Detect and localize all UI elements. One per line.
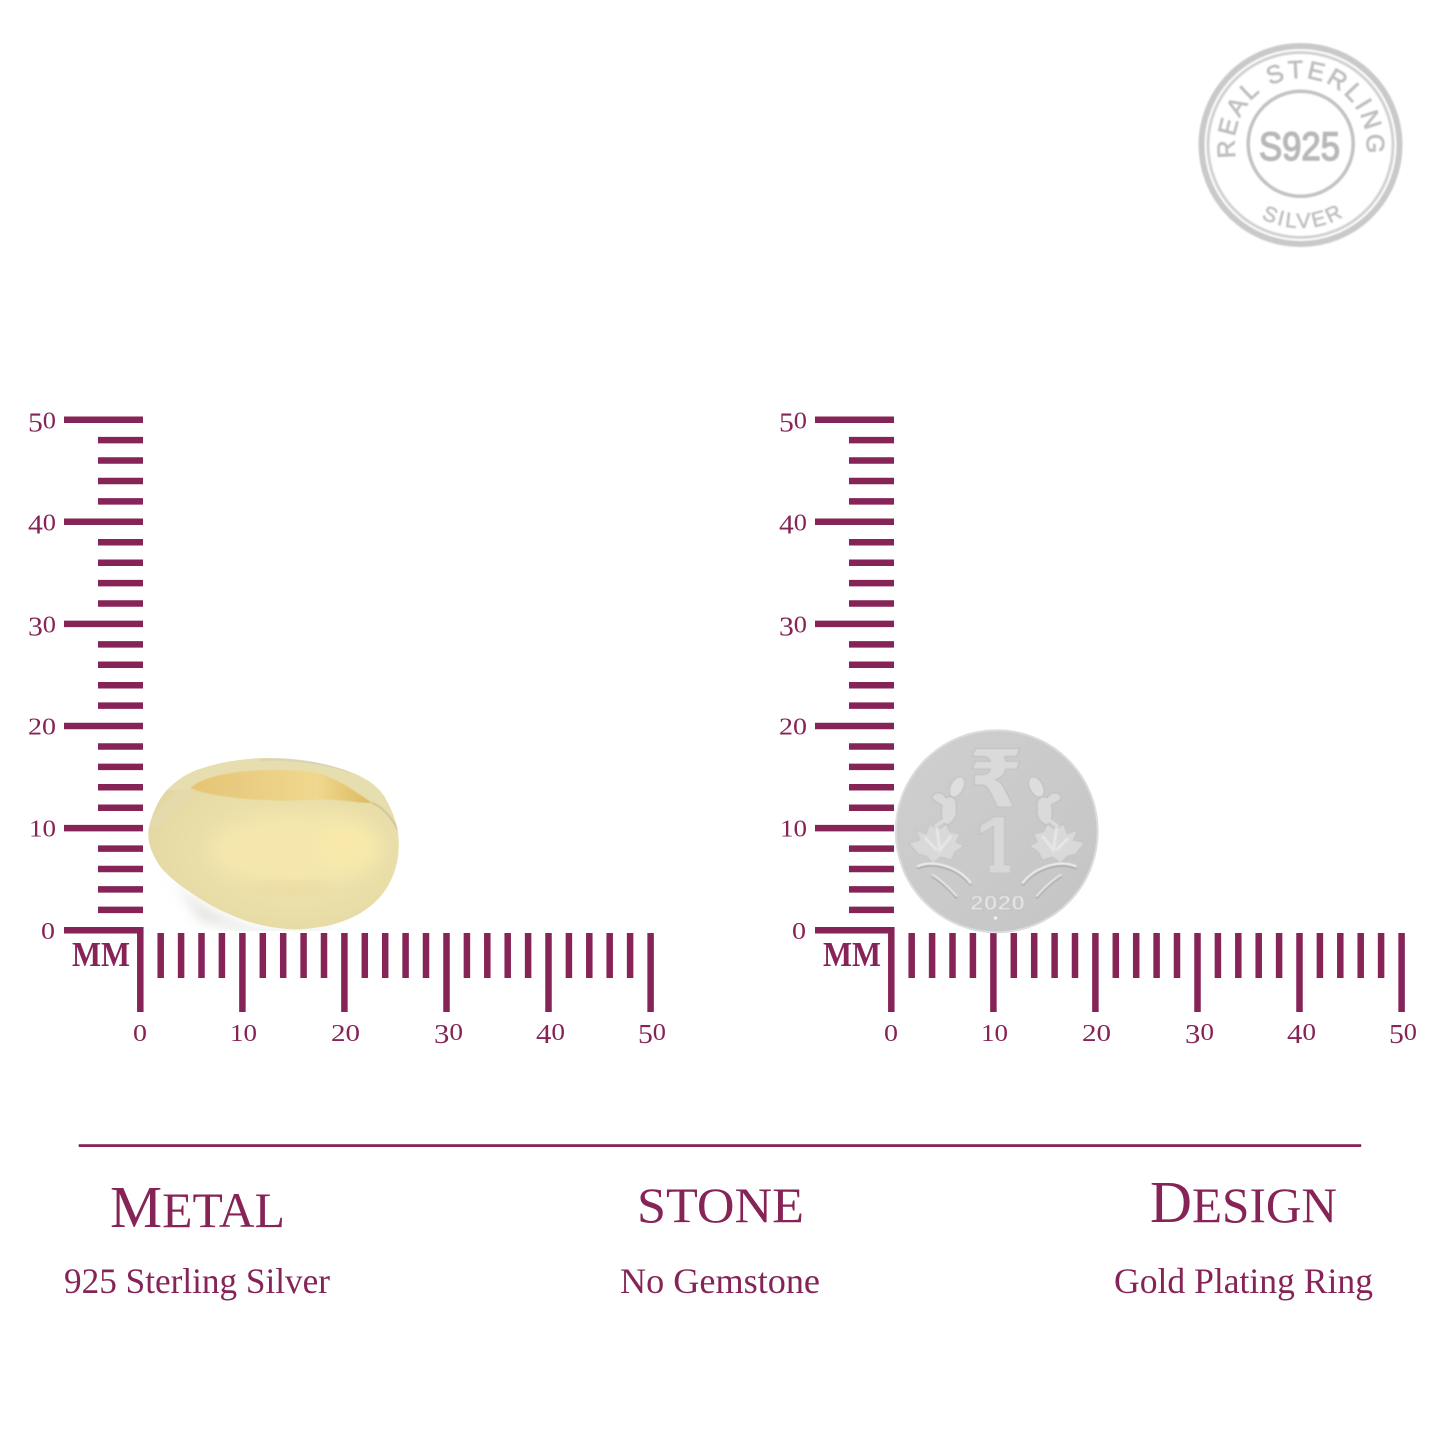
- stamp: real sterling silver S925: SILVER: [1262, 205, 1343, 229]
- horizontal labels: 0: [653, 1020, 666, 1046]
- coin year: 2020: [970, 892, 1025, 915]
- vertical labels: 3: [779, 612, 794, 642]
- vertical labels: 0: [794, 612, 807, 638]
- heading: design: DESIGN: [1150, 1169, 1337, 1235]
- ring inner band: [190, 770, 372, 803]
- vertical labels: 0: [41, 919, 55, 945]
- horizontal scale ticks: [140, 927, 651, 1012]
- right ruler: [779, 408, 1417, 1049]
- horizontal labels: 10: [230, 1021, 257, 1047]
- vertical labels: 0: [43, 408, 56, 434]
- vertical labels: 3: [28, 612, 43, 642]
- horizontal labels: 20: [331, 1021, 360, 1047]
- vertical labels: [779, 408, 807, 945]
- horizontal scale ticks: [891, 927, 1402, 1012]
- horizontal labels: 0: [1200, 1020, 1214, 1046]
- coin dot: [994, 916, 997, 920]
- vertical scale ticks: [815, 420, 894, 930]
- horizontal labels: [133, 1019, 666, 1049]
- rupee symbol: ₹: [968, 733, 1024, 826]
- denomination: 1: [974, 800, 1020, 891]
- stamp: real sterling silver S925: [1198, 42, 1403, 248]
- horizontal labels: 0: [1404, 1020, 1417, 1046]
- horizontal labels: 10: [981, 1021, 1008, 1047]
- vertical labels: 5: [779, 408, 794, 438]
- ring photo: [148, 756, 399, 945]
- horizontal labels: 0: [133, 1021, 147, 1047]
- vertical labels: 0: [794, 408, 807, 434]
- vertical labels: 0: [43, 612, 56, 638]
- value: design: Gold Plating Ring: [1114, 1261, 1373, 1301]
- ring shadow: [183, 892, 322, 931]
- stamp: real sterling silver S925: S925: [1259, 125, 1340, 169]
- left wreath: [909, 774, 971, 898]
- stamp: real sterling silver S925: REAL STERLING: [1216, 60, 1386, 158]
- divider line: [79, 1144, 1361, 1147]
- one rupee coin: [896, 730, 1098, 932]
- unit label: MM: [823, 935, 881, 974]
- horizontal labels: 5: [638, 1019, 653, 1049]
- horizontal labels: 20: [1082, 1021, 1111, 1047]
- vertical labels: [28, 408, 56, 945]
- vertical labels: 20: [779, 714, 807, 740]
- horizontal labels: 0: [1302, 1020, 1316, 1046]
- vertical labels: 0: [792, 919, 806, 945]
- horizontal labels: 4: [536, 1019, 552, 1049]
- vertical labels: 4: [779, 510, 794, 540]
- right wreath: [1022, 774, 1084, 898]
- vertical labels: 0: [794, 510, 807, 536]
- ring shading: [150, 758, 398, 868]
- heading: stone: STONE: [637, 1177, 804, 1233]
- value: metal: 925 Sterling Silver: [64, 1261, 330, 1301]
- value: stone: No Gemstone: [620, 1261, 820, 1301]
- vertical labels: 4: [28, 510, 43, 540]
- vertical labels: 5: [28, 408, 43, 438]
- horizontal labels: 0: [449, 1020, 463, 1046]
- unit label: MM: [72, 935, 130, 974]
- horizontal labels: 3: [1185, 1019, 1200, 1049]
- vertical labels: 20: [28, 714, 56, 740]
- horizontal labels: 4: [1287, 1019, 1303, 1049]
- vertical scale ticks: [64, 420, 143, 930]
- horizontal labels: 0: [551, 1020, 565, 1046]
- vertical labels: 10: [780, 816, 807, 842]
- horizontal labels: 0: [884, 1021, 898, 1047]
- horizontal labels: 5: [1389, 1019, 1404, 1049]
- coin face: [896, 730, 1098, 932]
- horizontal labels: 3: [434, 1019, 449, 1049]
- horizontal labels: [884, 1019, 1417, 1049]
- left ruler: [28, 408, 666, 1049]
- vertical labels: 0: [43, 510, 56, 536]
- ring body: [148, 758, 399, 929]
- vertical labels: 10: [29, 816, 56, 842]
- heading: metal: METAL: [110, 1174, 285, 1240]
